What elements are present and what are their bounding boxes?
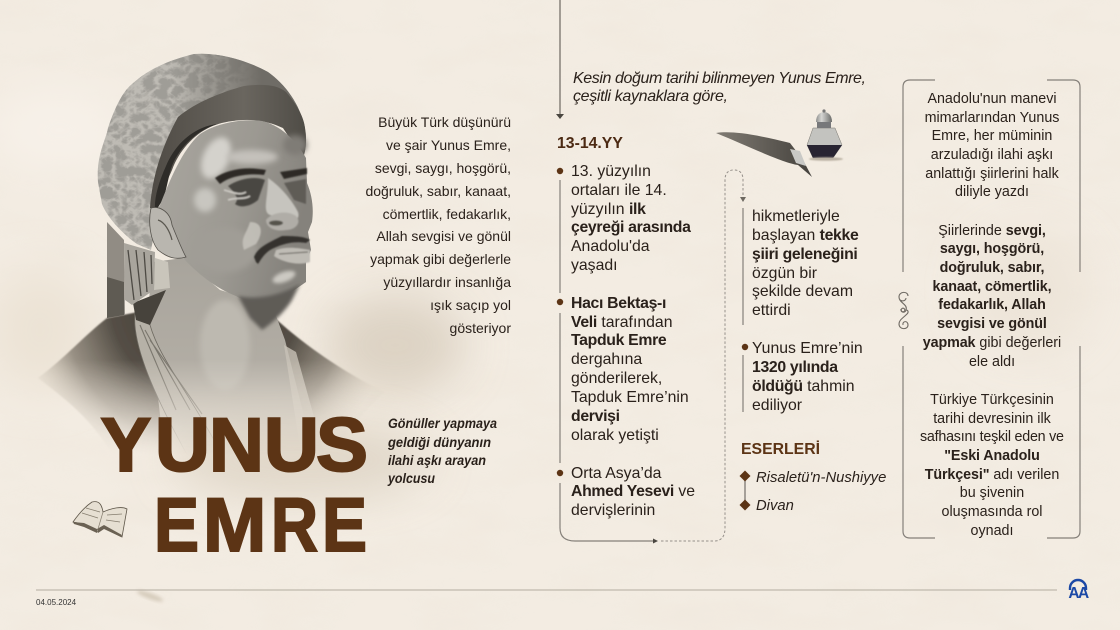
icon: quill and inkwell <box>716 109 843 177</box>
intro paragraph: doğruluk, sabır, kanaat, <box>365 183 511 199</box>
right panel text: oluşmasında rol <box>942 504 1042 520</box>
timeline text column one: yüzyılın ilk <box>571 201 646 218</box>
right panel text: Emre, her müminin <box>932 128 1052 144</box>
timeline text column one <box>571 163 695 519</box>
quote text <box>387 416 497 486</box>
intro paragraph: yapmak gibi değerlerle <box>370 251 511 267</box>
timeline text column two: hikmetleriyle <box>752 208 840 225</box>
timeline text column one: Tapduk Emre’nin <box>571 389 689 406</box>
timeline text column one: Orta Asya’da <box>571 465 662 482</box>
title: Yunus Emre: U <box>155 403 210 488</box>
brows and eyes <box>215 168 310 264</box>
right panel text: sevgisi ve gönül <box>937 316 1047 332</box>
timeline text column one: çeyreği arasında <box>571 219 691 236</box>
timeline text column two: şekilde devam <box>752 283 853 300</box>
timeline text column two: öldüğü tahmin <box>752 378 855 395</box>
birth intro text: Kesin doğum tarihi bilinmeyen Yunus Emre, <box>573 70 866 87</box>
footer line <box>36 589 1057 591</box>
right panel text: Anadolu'nun manevi <box>927 91 1057 107</box>
intro paragraph: sevgi, saygı, hoşgörü, <box>375 160 511 176</box>
timeline text column one: dervişlerinin <box>571 502 655 519</box>
timeline text column one: Tapduk Emre <box>571 332 667 349</box>
intro paragraph: yüzyıllardır insanlığa <box>383 274 511 290</box>
icon: open book <box>73 502 127 537</box>
icon: flourish <box>899 292 908 329</box>
dark turban band <box>150 85 306 208</box>
heading: 13-14.YY: 13-14.YY <box>557 135 623 152</box>
quote text: Gönüller yapmaya <box>388 416 497 431</box>
top arrow <box>556 0 564 119</box>
title: Yunus Emre: R <box>271 483 318 568</box>
quote text: ilahi aşkı arayan <box>388 453 486 468</box>
timeline connector <box>560 170 746 544</box>
right panel text: anlattığı şiirlerini halk <box>925 166 1060 182</box>
timeline text column one: gönderilerek, <box>571 370 662 387</box>
title: Yunus Emre: S <box>316 403 368 488</box>
intro paragraph: gösteriyor <box>450 320 511 336</box>
right panel text: kanaat, cömertlik, <box>933 279 1052 295</box>
right panel text: "Eski Anadolu <box>944 448 1040 464</box>
quote text: geldiği dünyanın <box>387 435 491 450</box>
right panel text: saygı, hoşgörü, <box>940 241 1044 257</box>
timeline text column one: dervişi <box>571 408 620 425</box>
title: Yunus Emre: E <box>322 483 367 568</box>
right panel text: bu şivenin <box>960 485 1024 501</box>
turban tail <box>124 243 155 305</box>
timeline text column two: başlayan tekke <box>752 227 859 244</box>
timeline text column two: Yunus Emre’nin <box>752 340 863 357</box>
works list: Divan <box>756 498 794 514</box>
title: Yunus Emre <box>100 403 368 568</box>
right panel text: tarihi devresinin ilk <box>933 411 1052 427</box>
quote text: yolcusu <box>387 471 436 486</box>
right panel text: oynadı <box>971 523 1013 539</box>
timeline text column one: ortaları ile 14. <box>571 182 667 199</box>
date: 04.05.2024 <box>36 598 77 607</box>
lower body fading into paper <box>40 258 365 449</box>
timeline text column two: 1320 yılında <box>752 359 838 376</box>
turban <box>98 54 306 250</box>
intro paragraph: ışık saçıp yol <box>430 297 511 313</box>
timeline text column two: ediliyor <box>752 397 802 414</box>
forehead highlight <box>195 133 237 183</box>
face <box>150 120 313 330</box>
title: Yunus Emre: M <box>203 483 266 568</box>
timeline text column one: yaşadı <box>571 257 618 274</box>
intro paragraph: cömertlik, fedakarlık, <box>383 206 511 222</box>
timeline text column two <box>752 208 863 414</box>
right panel text: mimarlarından Yunus <box>925 110 1059 126</box>
timeline text column one: Veli tarafından <box>571 314 672 331</box>
birth intro text <box>573 70 866 105</box>
works list <box>740 470 886 514</box>
right panel bracket <box>903 80 1080 538</box>
right panel text: yapmak gibi değerleri <box>923 335 1061 351</box>
title: Yunus Emre: N <box>209 403 264 488</box>
moustache <box>254 236 310 264</box>
upper right shaded wrap <box>170 54 305 128</box>
birth intro text: çeşitli kaynaklara göre, <box>573 88 728 105</box>
timeline dots <box>557 168 748 476</box>
timeline text column two: özgün bir <box>752 265 817 282</box>
portrait of Yunus Emre <box>38 54 384 460</box>
right panel text: diliyle yazdı <box>955 184 1029 200</box>
timeline text column two: ettirdi <box>752 302 791 319</box>
title: Yunus Emre: U <box>264 403 319 488</box>
right panel text: doğruluk, sabır, <box>940 260 1045 276</box>
right panel text: Türkçesi" adı verilen <box>925 467 1059 483</box>
right panel text <box>920 91 1064 539</box>
right panel text: ele aldı <box>969 354 1015 370</box>
right panel text: Şiirlerinde sevgi, <box>938 223 1046 239</box>
right panel text: arzuladığı ilahi aşkı <box>931 147 1053 163</box>
nose <box>266 178 299 221</box>
heading: Eserleri: ESERLERİ <box>741 440 820 458</box>
timeline text column one: Hacı Bektaş-ı <box>571 295 666 312</box>
intro paragraph: Büyük Türk düşünürü <box>378 114 511 130</box>
timeline text column one: Anadolu'da <box>571 238 650 255</box>
title: Yunus Emre: Y <box>100 403 151 488</box>
timeline text column one: Ahmed Yesevi ve <box>571 483 695 500</box>
back hair strip <box>107 222 125 318</box>
timeline text column one: 13. yüzyılın <box>571 163 651 180</box>
right panel text: Türkiye Türkçesinin <box>930 392 1054 408</box>
right panel text: fedakarlık, Allah <box>938 297 1046 313</box>
chin <box>271 268 297 286</box>
intro paragraph: Allah sevgisi ve gönül <box>376 228 511 244</box>
intro paragraph: ve şair Yunus Emre, <box>386 137 511 153</box>
right panel text: safhasını teşkil eden ve <box>920 429 1064 445</box>
timeline text column two: şiiri geleneğini <box>752 246 858 263</box>
works list: Risaletü'n-Nushiyye <box>756 470 886 486</box>
timeline text column one: olarak yetişti <box>571 427 659 444</box>
title: Yunus Emre: E <box>154 483 199 568</box>
ear <box>150 208 186 258</box>
icon: AA logo: AA <box>1068 585 1089 602</box>
intro paragraph <box>365 114 511 336</box>
timeline text column one: dergahına <box>571 351 642 368</box>
